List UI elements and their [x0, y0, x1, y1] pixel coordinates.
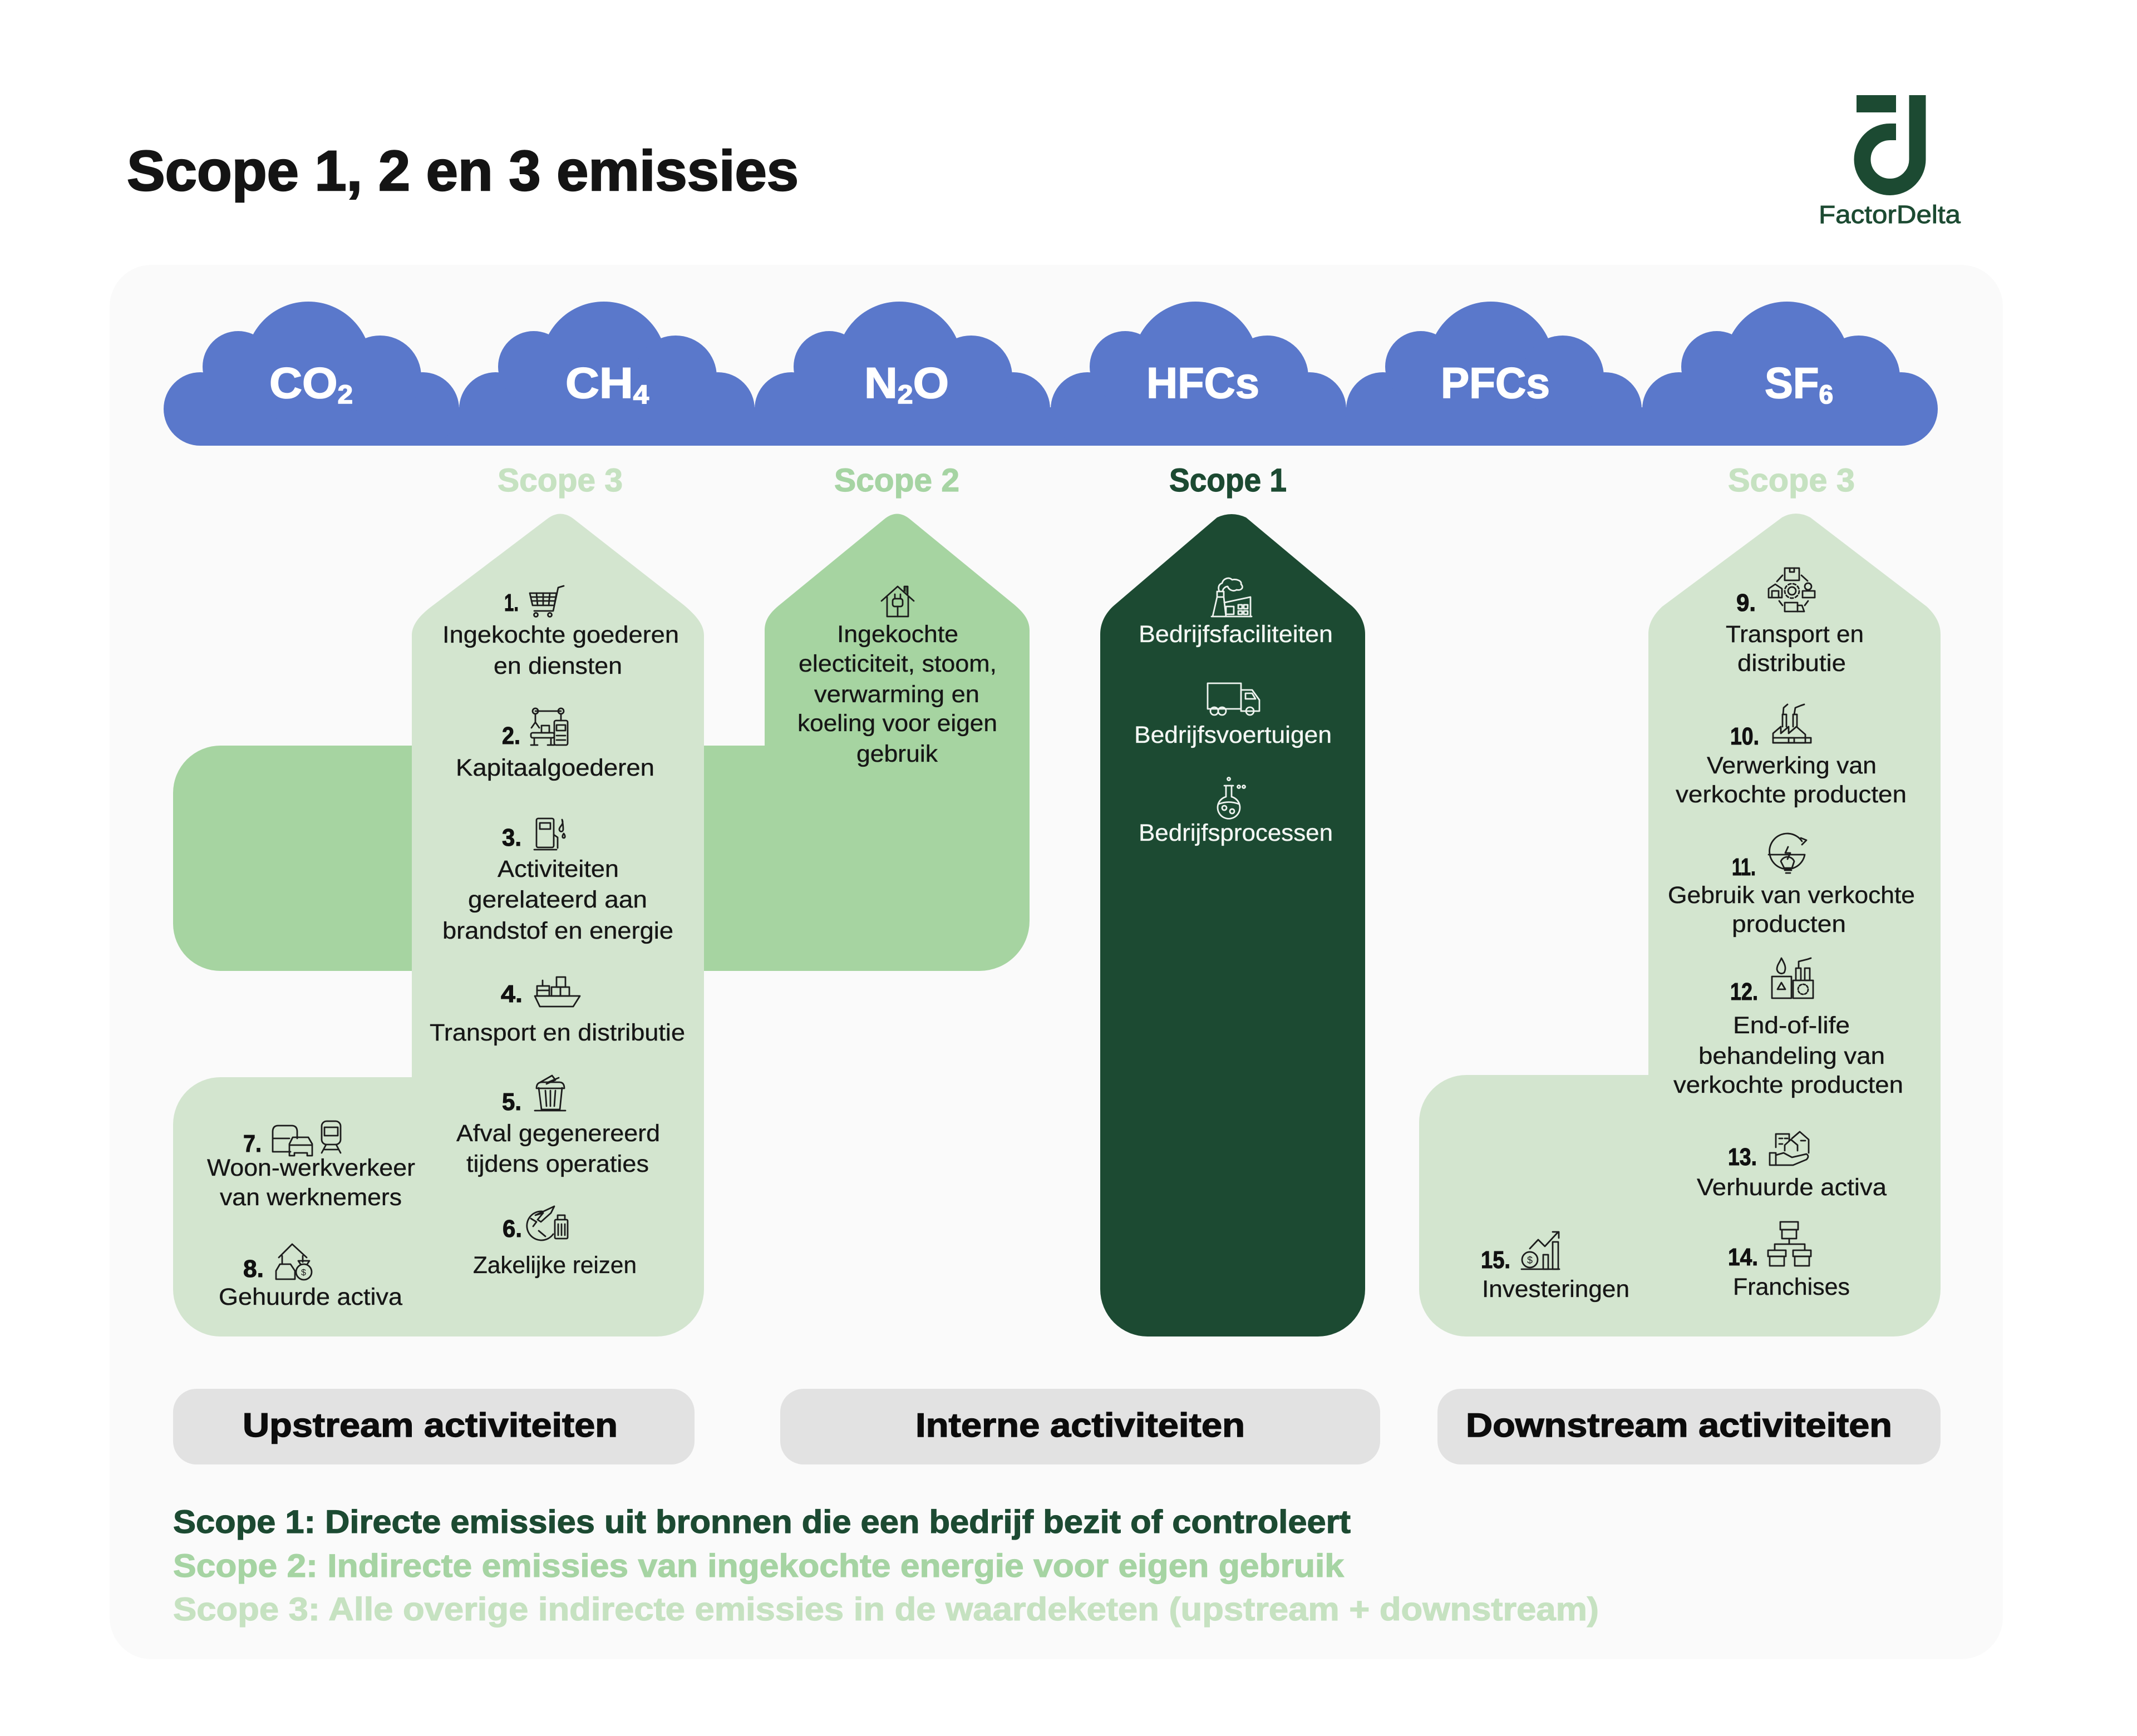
item: Bedrijfsfaciliteiten: [1139, 578, 1333, 648]
item 3: 3.: [502, 824, 521, 851]
label: N2O: 2: [898, 379, 913, 409]
scope heading: Scope 1: Scope 1: [1169, 462, 1287, 499]
label: PFCs: PFCs: [1441, 358, 1550, 407]
item 13: [1697, 1132, 1887, 1201]
icon: truck: [1208, 683, 1259, 715]
icon: bus, car and train: [273, 1121, 341, 1156]
item 12: verkochte producten: [1673, 1072, 1903, 1098]
label: SF6: 6: [1819, 379, 1833, 409]
cloud: CH4: [459, 302, 755, 446]
text: scope 2 description: koeling voor eigen: [797, 710, 997, 737]
pill: downstream: Downstream activiteiten: [1466, 1407, 1892, 1444]
item 2: Kapitaalgoederen: [456, 754, 654, 781]
item 12: behandeling van: [1698, 1043, 1885, 1069]
item 8: 8.: [243, 1255, 264, 1283]
icon: investment growth: $: [1527, 1255, 1533, 1266]
label: N2O: N: [864, 358, 895, 407]
panel: upstream scope 3 shape: [173, 514, 704, 1336]
item 8: Gehuurde activa: [219, 1284, 402, 1310]
item 10: verkochte producten: [1676, 781, 1907, 808]
icon: light bulb with cycle: [1769, 834, 1806, 873]
item 15: [1481, 1232, 1629, 1303]
item 13: Verhuurde activa: [1697, 1174, 1887, 1201]
scope heading: Scope 3 upstream: Scope 3: [498, 462, 623, 499]
item 6: Zakelijke reizen: [473, 1252, 637, 1279]
panel: background: [110, 265, 2003, 1659]
item 10: Verwerking van: [1707, 752, 1877, 779]
cloud: N2O: [755, 302, 1050, 446]
item 10: [1676, 704, 1907, 808]
item 2: 2.: [502, 722, 520, 749]
item 2: [456, 708, 654, 781]
icon: shopping cart: [530, 586, 564, 617]
item: Bedrijfsvoertuigen: [1134, 683, 1332, 748]
item 4: [430, 977, 685, 1046]
cloud: HFCs: [1051, 302, 1346, 446]
title: Scope 1, 2 en 3 emissies: [127, 139, 799, 203]
text: scope 2 description: verwarming en: [814, 681, 979, 708]
item 12: [1673, 958, 1903, 1098]
item 1: Ingekochte goederen: [442, 622, 679, 648]
logo: FactorDelta: FactorDelta: [1819, 200, 1961, 229]
text: scope 2 description: electiciteit, stoom,: [799, 650, 997, 677]
icon: factory with chimneys: [1773, 704, 1811, 743]
scope heading: Scope 2: Scope 2: [834, 462, 959, 499]
label: SF6: SF: [1765, 358, 1820, 407]
item 7: Woon-werkverkeer: [207, 1155, 415, 1181]
item 6: 6.: [503, 1215, 522, 1242]
icon: trash bin: [535, 1076, 565, 1111]
item 11: [1668, 834, 1915, 938]
pill: interne: [780, 1389, 1380, 1464]
pill: interne: Interne activiteiten: [915, 1407, 1245, 1444]
panel: scope 2 shape: [173, 514, 1030, 971]
item 9: distributie: [1737, 650, 1846, 677]
icon: recycle bin and incinerator: [1772, 958, 1813, 998]
item: Bedrijfsprocessen: [1139, 778, 1333, 846]
icon: house with plug: [882, 586, 914, 617]
icon: investment growth: [1521, 1232, 1559, 1269]
item 11: 11.: [1732, 854, 1756, 881]
legend: scope 2: Scope 2: Indirecte emissies van ingekochte energie voor eigen gebruik: [173, 1548, 1345, 1584]
item 11: Gebruik van verkochte: [1668, 882, 1915, 909]
pill: upstream: Upstream activiteiten: [243, 1407, 618, 1444]
item 7: [207, 1121, 415, 1211]
item 8: [219, 1244, 402, 1310]
cloud: CO2: [164, 302, 459, 446]
panel: downstream scope 3 shape: [1419, 514, 1941, 1336]
item 14: Franchises: [1733, 1274, 1850, 1300]
item 10: 10.: [1730, 723, 1759, 750]
item 15: 15.: [1481, 1246, 1510, 1274]
item: Bedrijfsfaciliteiten: Bedrijfsfaciliteiten: [1139, 621, 1333, 648]
item 9: 9.: [1736, 589, 1756, 617]
item 4: 4.: [501, 980, 523, 1008]
item 3: Activiteiten: [498, 856, 619, 882]
item 15: Investeringen: [1482, 1276, 1629, 1303]
item 5: tijdens operaties: [466, 1151, 649, 1177]
item 6: [473, 1206, 637, 1279]
item 5: Afval gegenereerd: [456, 1120, 660, 1147]
item 14: 14.: [1728, 1244, 1758, 1271]
icon: franchise shops: [1768, 1222, 1811, 1266]
logo: FactorDelta: [1819, 95, 1961, 229]
item 11: producten: [1732, 911, 1846, 938]
item 3: brandstof en energie: [442, 918, 673, 944]
gas labels: [269, 358, 1833, 409]
item 5: 5.: [502, 1088, 521, 1116]
item 9: Transport en: [1726, 621, 1864, 648]
item 14: [1728, 1222, 1850, 1300]
pill: upstream: [173, 1389, 695, 1464]
item: Bedrijfsprocessen: Bedrijfsprocessen: [1139, 820, 1333, 846]
icon: factory: [1212, 578, 1252, 617]
icon: hand with buildings: [1770, 1132, 1809, 1165]
item 12: 12.: [1730, 978, 1758, 1005]
label: HFCs: HFCs: [1146, 358, 1259, 407]
legend: [173, 1504, 1599, 1628]
icon: house, car and money bag: $: [301, 1268, 306, 1278]
icon: globe, plane and suitcase: [527, 1206, 568, 1240]
icon: flask: [1218, 778, 1245, 818]
item 4: Transport en distributie: [430, 1019, 685, 1046]
item 1: 1.: [504, 589, 519, 617]
gas clouds row: [164, 302, 1938, 446]
cloud: SF6: [1642, 302, 1938, 446]
icon: supply cycle: [1769, 568, 1815, 611]
label: CO2: 2: [338, 379, 353, 409]
legend: scope 1: Scope 1: Directe emissies uit bronnen die een bedrijf bezit of controleert: [173, 1504, 1351, 1540]
scope heading: Scope 3 downstream: Scope 3: [1728, 462, 1855, 499]
item 7: 7.: [243, 1130, 262, 1157]
icon: robot arm and conveyor: [531, 708, 568, 745]
item 3: [442, 818, 673, 944]
cloud: PFCs: [1346, 302, 1642, 446]
icon: cargo ship: [535, 977, 580, 1007]
item: Bedrijfsvoertuigen: Bedrijfsvoertuigen: [1134, 722, 1332, 748]
icon: house, car and money bag: [276, 1244, 312, 1280]
item 5: [456, 1076, 660, 1177]
pill: downstream: [1437, 1389, 1941, 1464]
label: CO2: CO: [269, 358, 334, 407]
text: scope 2 description: [797, 621, 997, 767]
item 1: [442, 586, 679, 679]
cloud base band: [200, 407, 1901, 446]
panel: scope 1 shape: [1100, 514, 1365, 1336]
item 9: [1726, 568, 1864, 677]
item 1: en diensten: [494, 653, 622, 679]
item 3: gerelateerd aan: [468, 886, 647, 913]
label: N2O: O: [913, 358, 949, 407]
icon: fuel pump: [534, 818, 565, 850]
item 13: 13.: [1728, 1143, 1757, 1171]
item 7: van werknemers: [220, 1184, 402, 1211]
item 12: End-of-life: [1733, 1012, 1850, 1039]
text: scope 2 description: gebruik: [856, 741, 938, 767]
text: scope 2 description: Ingekochte: [837, 621, 958, 648]
label: CH4: CH: [565, 358, 628, 407]
label: CH4: 4: [633, 379, 649, 409]
legend: scope 3: Scope 3: Alle overige indirecte emissies in de waardeketen (upstream + downstream): [173, 1591, 1599, 1628]
